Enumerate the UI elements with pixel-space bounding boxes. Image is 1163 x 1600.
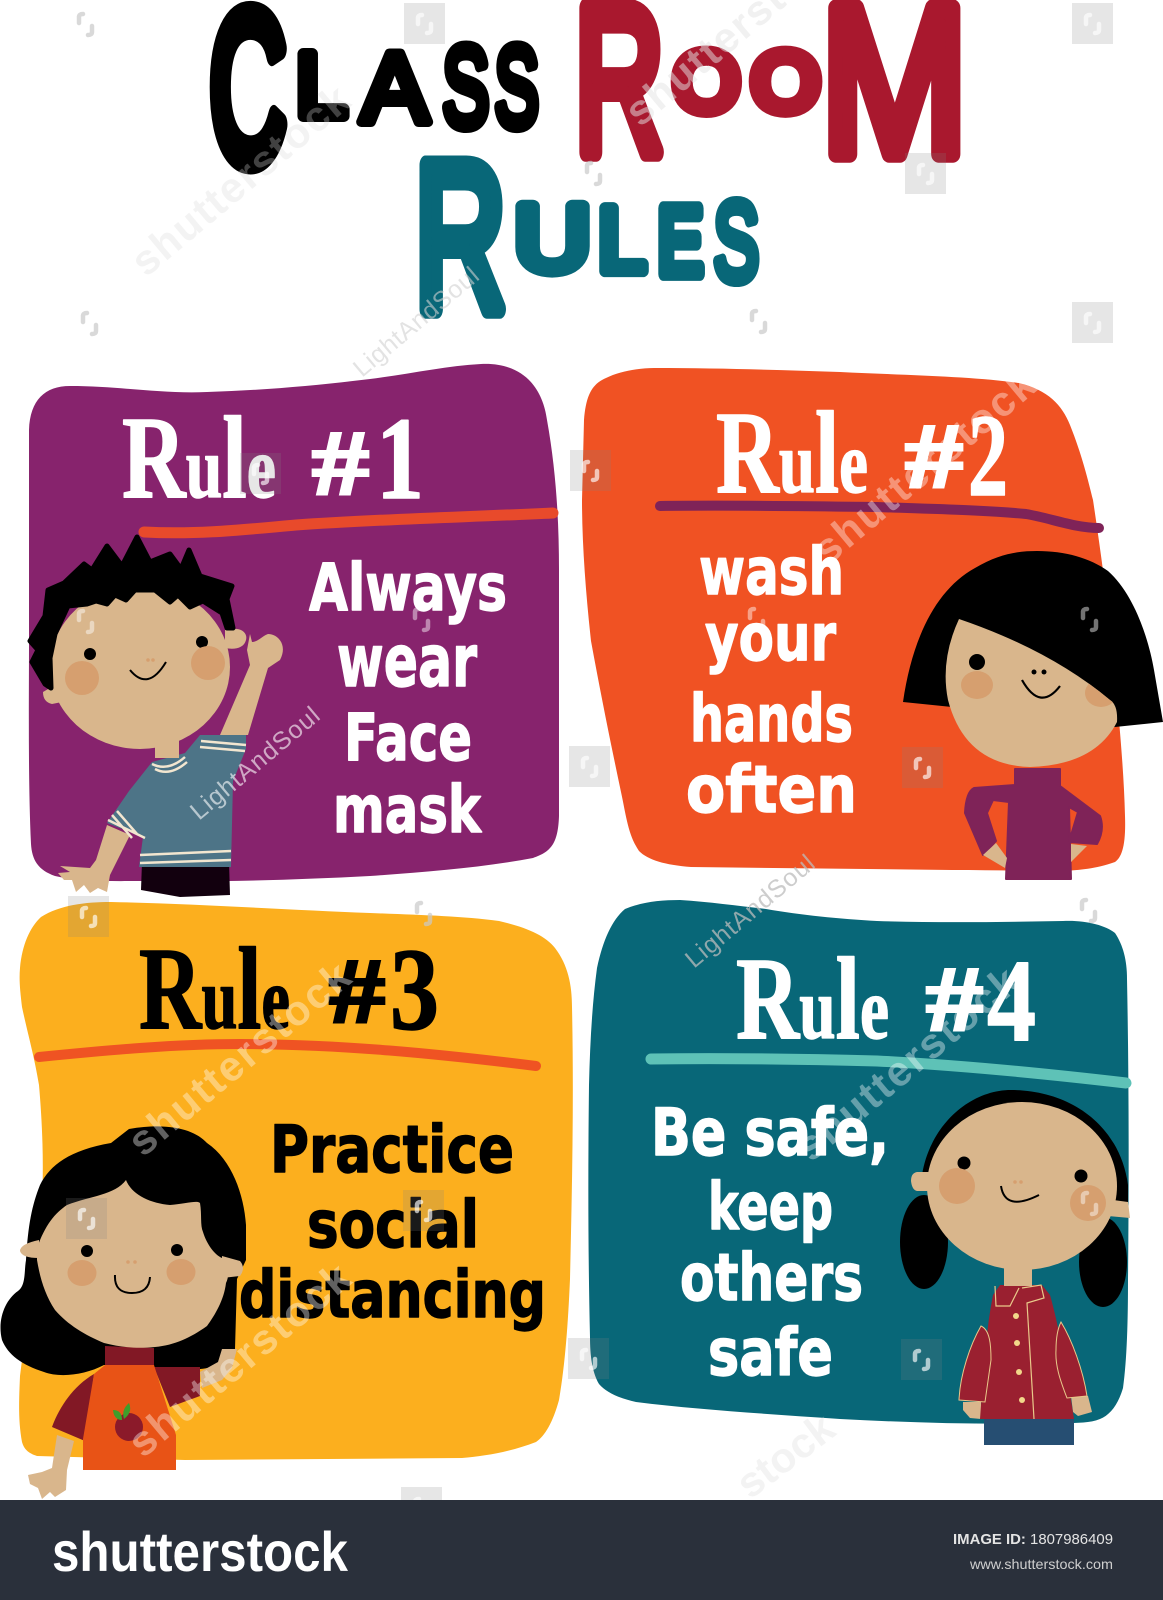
panel: rule 2 <box>582 368 1163 879</box>
hands <box>963 1396 1092 1419</box>
face details <box>969 654 985 670</box>
ears <box>911 1172 1130 1218</box>
heading: Rule #1: # <box>312 412 369 514</box>
face <box>946 619 1117 767</box>
character: girl with bob hair <box>903 551 1163 879</box>
rule text: wash your hands often: your <box>705 601 836 676</box>
ears <box>43 629 246 704</box>
character: girl with pigtails <box>900 1090 1130 1445</box>
watermarks: LightAndSoul <box>348 262 485 383</box>
divider line <box>660 506 1099 528</box>
rule text: Always wear Face mask: Always <box>309 551 507 626</box>
rule text: Be safe, keep others safe: Be safe, <box>651 1096 889 1171</box>
face <box>37 1180 228 1348</box>
rule text: Be safe, keep others safe: safe <box>708 1316 833 1391</box>
title: Class Room Rules <box>210 0 968 354</box>
watermarks: shutterstock <box>804 360 1045 573</box>
heading: Rule #4: Rule <box>736 933 889 1064</box>
rule text: Practice social distancing: social <box>307 1188 479 1263</box>
watermarks: shutterstock <box>119 1253 360 1466</box>
left arm and hand <box>28 1435 74 1499</box>
heading: Rule #4: # <box>926 948 983 1050</box>
rule text: Be safe, keep others safe <box>651 1096 889 1391</box>
rule text: wash your hands often: hands <box>690 682 853 757</box>
heading: Rule #2: 2 <box>968 390 1008 521</box>
divider line <box>144 513 553 533</box>
shirt <box>107 735 246 867</box>
rule text: Practice social distancing <box>239 1113 546 1333</box>
shorts <box>141 862 230 897</box>
word: Rules: L <box>598 189 646 291</box>
word: Class <box>210 0 539 207</box>
watermarks: LightAndSoul <box>680 849 820 974</box>
rule text: wash your hands often: wash <box>699 535 844 610</box>
heading: Rule #3 <box>139 923 439 1055</box>
rule text: Be safe, keep others safe: others <box>680 1241 863 1316</box>
panel: rule 1 <box>29 364 559 897</box>
left arm and hand <box>58 825 130 893</box>
hair <box>30 537 233 688</box>
face details <box>958 1156 970 1170</box>
watermarks: shutterstock <box>122 75 359 285</box>
shirt stripes <box>108 741 246 863</box>
rule text: wash your hands often <box>686 535 857 828</box>
hair <box>0 1126 246 1375</box>
heading: Rule #2 <box>716 387 1008 521</box>
panel background <box>19 902 573 1460</box>
divider line <box>39 1044 536 1066</box>
panel: rule 3 <box>0 902 573 1499</box>
collar and sleeves <box>52 1346 200 1441</box>
website: www.shutterstock.com <box>969 1556 1113 1572</box>
right hand <box>200 1349 237 1388</box>
word: Class: L <box>296 35 347 136</box>
rule text: wash your hands often: often <box>686 753 857 828</box>
word: Class: S <box>495 23 539 150</box>
character: boy waving <box>30 537 283 897</box>
word: Rules: U <box>515 187 590 291</box>
word: Class: A <box>361 33 429 144</box>
apple <box>113 1403 143 1441</box>
word: Room: O <box>674 34 739 128</box>
hands on hips <box>983 843 1087 868</box>
heading: Rule #3: 3 <box>390 924 439 1055</box>
image id: IMAGE ID: 1807986409 <box>953 1531 1113 1548</box>
panel background <box>29 364 559 881</box>
rule text: Always wear Face mask: mask <box>333 773 482 848</box>
heading: Rule #4: 4 <box>987 935 1036 1066</box>
hair and pigtails <box>900 1090 1128 1307</box>
buttons <box>1013 1313 1025 1403</box>
collar and placket <box>995 1285 1044 1419</box>
sleeves <box>959 1322 1087 1402</box>
word: Rules: E <box>658 187 703 295</box>
heading: Rule #3: Rule <box>139 923 290 1054</box>
heading: Rule #1: 1 <box>376 393 424 524</box>
rule text: Always wear Face mask <box>309 551 507 848</box>
ears <box>20 1240 243 1278</box>
rule text: Practice social distancing: Practice <box>270 1113 514 1188</box>
face details <box>81 1245 93 1257</box>
heading: Rule #1 <box>122 392 424 524</box>
heading: Rule #3: # <box>329 940 385 1042</box>
heading: Rule #4 <box>736 933 1036 1066</box>
raised arm <box>220 634 283 735</box>
head <box>50 585 230 749</box>
rule text: Always wear Face mask: Face <box>344 701 472 776</box>
pants <box>984 1419 1074 1445</box>
watermarks: shutterstock <box>119 952 360 1165</box>
face details <box>84 648 96 660</box>
divider line <box>651 1059 1126 1083</box>
word: Rules <box>415 120 759 354</box>
rule text: Always wear Face mask: wear <box>337 619 477 703</box>
word: Room <box>575 0 968 200</box>
word: Rules: R <box>415 120 506 354</box>
word: Rules: S <box>714 180 759 304</box>
rule text: Be safe, keep others safe: keep <box>708 1170 833 1245</box>
neck <box>1004 1262 1032 1286</box>
apron <box>83 1365 176 1470</box>
head <box>927 1102 1117 1270</box>
sweater <box>965 769 1102 879</box>
jacket <box>980 1285 1074 1419</box>
word: Class: S <box>442 24 489 150</box>
logo: shutterstock: shutterstock <box>52 1520 349 1583</box>
hair <box>903 551 1163 727</box>
panel background <box>588 900 1129 1424</box>
panel background <box>582 368 1125 871</box>
footer bar <box>0 1500 1163 1600</box>
neck <box>155 740 179 758</box>
panel: rule 4 <box>588 900 1130 1445</box>
rule text: Practice social distancing: distancing <box>239 1258 546 1333</box>
heading: Rule #2: # <box>905 405 963 507</box>
watermarks: stock <box>727 1403 844 1507</box>
heading: Rule #1: Rule <box>122 392 276 523</box>
character: girl with apron <box>0 1126 246 1499</box>
word: Room: O <box>752 36 819 129</box>
heading: Rule #2: Rule <box>716 387 868 518</box>
watermarks: LightAndSoul <box>185 701 325 826</box>
watermarks: shutterstock <box>787 957 1028 1170</box>
